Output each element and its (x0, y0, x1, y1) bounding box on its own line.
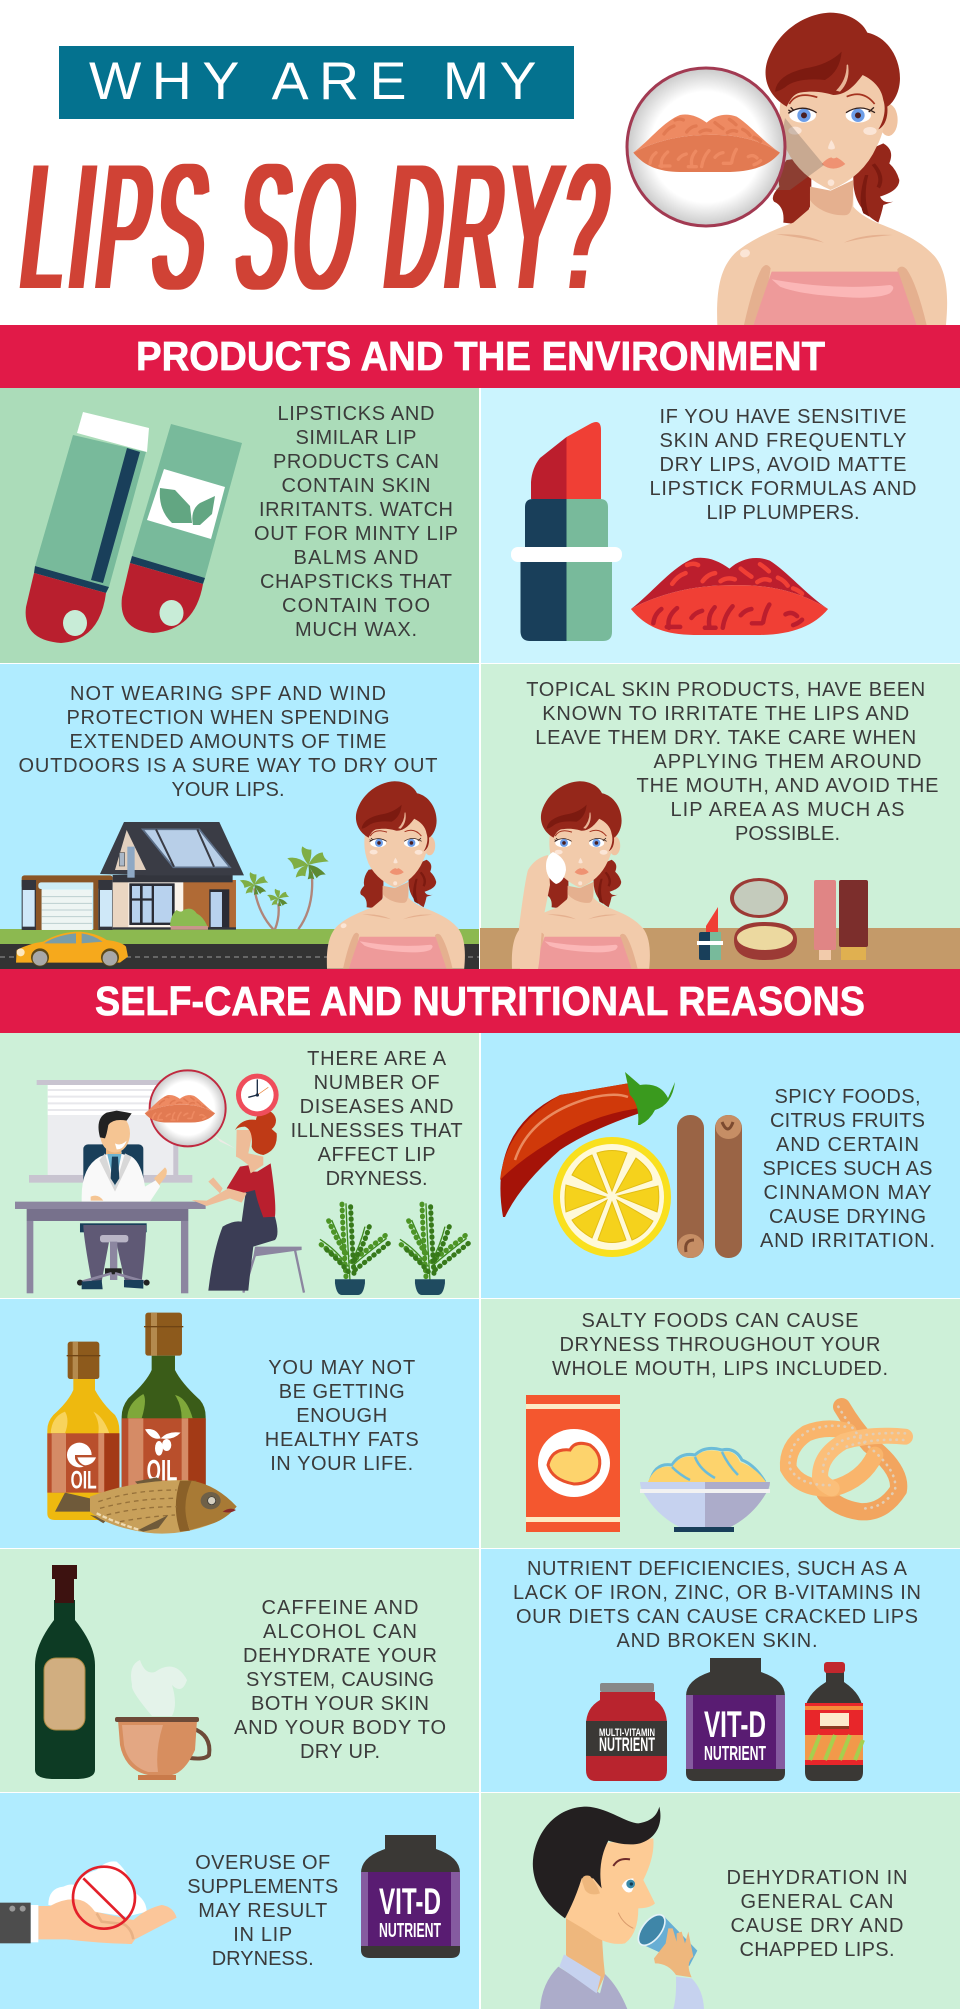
text: matte formulas: IF YOU HAVE SENSITIVE (660, 406, 906, 428)
text: lipsticks: LIPSTICKS AND (278, 403, 434, 425)
text: matte formulas: DRY LIPS, AVOID MATTE (660, 454, 906, 476)
text: salty (552, 1310, 888, 1380)
banner: self-care and nutritional reasons (0, 969, 960, 1033)
icon: hand with cotton pad (519, 852, 566, 969)
text: caffeine: CAFFEINE AND (262, 1597, 418, 1619)
panel: matte lipstick (481, 388, 960, 663)
icon: lipstick (511, 422, 622, 641)
icon: vit-d bottle: NUTRIENT (704, 1743, 766, 1765)
text: lipsticks: IRRITANTS. WATCH (259, 499, 453, 521)
text: topical (526, 679, 938, 845)
icon: bowl of chips (640, 1448, 770, 1532)
icon: vit-d bottle (686, 1658, 785, 1781)
text: lipsticks: CONTAIN TOO (282, 595, 430, 617)
text: matte formulas: SKIN AND FREQUENTLY (660, 430, 906, 452)
icon: vit-d bottle: NUTRIENT (379, 1920, 441, 1942)
text: topical: APPLYING THEM AROUND (654, 751, 922, 773)
text: fats: ENOUGH (296, 1405, 387, 1427)
icon: snack box (526, 1395, 620, 1532)
text: dehydration (726, 1867, 908, 1961)
panel: spicy foods (481, 1033, 960, 1298)
text: spf (18, 683, 438, 801)
title: lips so dry: LIPS SO DRY? (13, 129, 623, 327)
text: dehydration: DEHYDRATION IN (726, 1867, 908, 1889)
text: nutrient deficiencies: LACK OF IRON, ZINC, OR B-VITAMINS IN (513, 1582, 921, 1604)
text: spicy: AND IRRITATION. (760, 1230, 935, 1252)
text: salty: WHOLE MOUTH, LIPS INCLUDED. (552, 1358, 888, 1380)
icon: multi-vitamin jar: MULTI-VITAMIN (599, 1727, 655, 1739)
icon: multi-vitamin jar (586, 1683, 667, 1781)
text: diseases: DRYNESS. (326, 1168, 428, 1190)
icon: vit-d bottle: VIT-D (379, 1881, 441, 1922)
icon: cosmetics (697, 878, 868, 960)
text: fats: YOU MAY NOT (268, 1357, 415, 1379)
text: nutrient deficiencies: AND BROKEN SKIN. (616, 1630, 818, 1652)
text: lipsticks: OUT FOR MINTY LIP (254, 523, 458, 545)
text: spf: OUTDOORS IS A SURE WAY TO DRY OUT (18, 755, 438, 777)
text: topical: THE MOUTH, AND AVOID THE (636, 775, 938, 797)
text: supplements: MAY RESULT (198, 1900, 327, 1922)
text: matte formulas: LIP PLUMPERS. (706, 502, 860, 524)
text: spicy: SPICY FOODS, (774, 1086, 920, 1108)
text: dehydration: GENERAL CAN (740, 1891, 894, 1913)
panel: caffeine and alcohol (0, 1549, 479, 1792)
panel: diseases and illnesses (0, 1033, 479, 1298)
icon: hand with pills (0, 1861, 177, 1944)
text: salty: DRYNESS THROUGHOUT YOUR (560, 1334, 880, 1356)
icon: yellow oil bottle (47, 1342, 119, 1520)
text: spicy: AND CERTAIN (776, 1134, 919, 1156)
text: topical: KNOWN TO IRRITATE THE LIPS AND (542, 703, 909, 725)
text: spf: YOUR LIPS. (172, 779, 284, 801)
text: caffeine (234, 1597, 446, 1763)
tabletop (480, 928, 960, 969)
text: spf: EXTENDED AMOUNTS OF TIME (70, 731, 386, 753)
magnifier circle with lips (627, 68, 785, 226)
panel: healthy fats (0, 1299, 479, 1548)
window (29, 1080, 192, 1183)
text: spf: NOT WEARING SPF AND WIND (70, 683, 386, 705)
figure: woman applying cream (512, 781, 650, 969)
banner: products and the environment (0, 325, 960, 388)
header background (0, 0, 960, 325)
icon: pretzel (788, 1407, 905, 1512)
text: nutrient deficiencies: OUR DIETS CAN CAUSE CRACKED LIPS (516, 1606, 918, 1628)
text: caffeine: DRY UP. (300, 1741, 380, 1763)
text: lipsticks: CONTAIN SKIN (282, 475, 430, 497)
icon: green oil bottle: OIL (147, 1455, 177, 1488)
text: caffeine: SYSTEM, CAUSING (246, 1669, 434, 1691)
desk (15, 1202, 206, 1293)
text: lipsticks (254, 403, 458, 641)
icon: cinnamon sticks (677, 1115, 742, 1258)
icon: house (22, 822, 244, 930)
text: caffeine: BOTH YOUR SKIN (251, 1693, 429, 1715)
text: lipsticks: CHAPSTICKS THAT (260, 571, 452, 593)
text: diseases: NUMBER OF (314, 1072, 440, 1094)
icon: cracked red lips (631, 558, 828, 635)
icon: green oil bottle (122, 1313, 206, 1490)
banner: self-care and nutritional reasons: SELF-CARE AND NUTRITIONAL REASONS (95, 978, 865, 1024)
text: fats: HEALTHY FATS (265, 1429, 419, 1451)
speech bubble with lips (145, 1070, 235, 1148)
icon: vit-d bottle (361, 1835, 460, 1958)
text: supplements: SUPPLEMENTS (187, 1876, 338, 1898)
text: nutrient deficiencies (513, 1558, 921, 1652)
icon: yellow car (16, 932, 128, 966)
doctor (77, 1111, 167, 1289)
text: spicy: CAUSE DRYING (769, 1206, 926, 1228)
text: fats: IN YOUR LIFE. (270, 1453, 413, 1475)
text: spicy (760, 1086, 935, 1252)
icon: left lip balm tube (26, 412, 149, 643)
illustration: oil bottles and fish (47, 1313, 237, 1534)
icon: clock (236, 1074, 279, 1116)
text: topical: LEAVE THEM DRY. TAKE CARE WHEN (535, 727, 916, 749)
panel: salty foods (481, 1299, 960, 1548)
icon: chili pepper (500, 1072, 675, 1217)
heading: why are my (59, 46, 574, 119)
text: caffeine: DEHYDRATE YOUR (243, 1645, 437, 1667)
text: supplements: IN LIP (233, 1924, 292, 1946)
text: diseases: AFFECT LIP (318, 1144, 436, 1166)
text: dehydration: CHAPPED LIPS. (740, 1939, 894, 1961)
road (0, 944, 479, 969)
panel: nutrient deficiencies (481, 1549, 960, 1792)
text: caffeine: AND YOUR BODY TO (234, 1717, 446, 1739)
text: nutrient deficiencies: NUTRIENT DEFICIENCIES, SUCH AS A (527, 1558, 908, 1580)
icon: small red bottle (805, 1662, 863, 1781)
banner: products and the environment: PRODUCTS AND THE ENVIRONMENT (136, 333, 825, 379)
text: lipsticks: SIMILAR LIP (296, 427, 416, 449)
text: fats: BE GETTING (279, 1381, 405, 1403)
text: diseases: ILLNESSES THAT (291, 1120, 463, 1142)
text: spicy: CINNAMON MAY (764, 1182, 932, 1204)
text: dehydration: CAUSE DRY AND (730, 1915, 904, 1937)
icon: vit-d bottle: VIT-D (704, 1704, 766, 1745)
water glass (633, 1910, 697, 1966)
figure: woman outdoors (327, 781, 465, 969)
icon: yellow oil bottle: OIL (71, 1467, 97, 1494)
heading: why are my: WHY ARE MY (89, 52, 547, 111)
illustration: doctor consultation (15, 1070, 469, 1295)
patient woman (192, 1111, 304, 1293)
panel: lip products (0, 388, 479, 663)
no symbol (73, 1867, 135, 1929)
icon: right lip balm tube with mint label (122, 424, 242, 633)
text: topical: POSSIBLE. (735, 823, 840, 845)
text: lipsticks: PRODUCTS CAN (273, 451, 439, 473)
illustration: man drinking water (533, 1807, 704, 2009)
text: salty: SALTY FOODS CAN CAUSE (582, 1310, 858, 1332)
text: diseases: DISEASES AND (300, 1096, 454, 1118)
icon: fish (55, 1477, 237, 1534)
text: matte formulas: LIPSTICK FORMULAS AND (650, 478, 916, 500)
text: supplements (187, 1852, 338, 1970)
text: lipsticks: MUCH WAX. (295, 619, 417, 641)
text: topical: LIP AREA AS MUCH AS (670, 799, 904, 821)
text: fats (265, 1357, 419, 1475)
illustration: woman with magnified lips (627, 13, 947, 325)
icon: steaming cup (115, 1660, 209, 1780)
magnifier beam (772, 118, 824, 190)
text: caffeine: ALCOHOL CAN (263, 1621, 417, 1643)
panel: overuse of supplements (0, 1793, 479, 2009)
icon: wine bottle (35, 1565, 95, 1779)
text: supplements: OVERUSE OF (195, 1852, 330, 1874)
text: diseases (291, 1048, 463, 1190)
panel: spf and wind outdoors (0, 664, 479, 969)
text: spf: PROTECTION WHEN SPENDING (66, 707, 390, 729)
icon: multi-vitamin jar: NUTRIENT (599, 1735, 655, 1756)
text: topical: TOPICAL SKIN PRODUCTS, HAVE BEEN (526, 679, 925, 701)
icon: palm trees (240, 846, 329, 929)
woman figure (717, 13, 947, 325)
text: matte formulas (650, 406, 916, 524)
text: lipsticks: BALMS AND (294, 547, 418, 569)
grass (0, 929, 479, 944)
icon: potted plants (319, 1203, 469, 1295)
text: diseases: THERE ARE A (307, 1048, 447, 1070)
text: spicy: SPICES SUCH AS (762, 1158, 932, 1180)
panel: topical skin products (480, 664, 960, 969)
panel: dehydration (481, 1793, 960, 2009)
text: supplements: DRYNESS. (212, 1948, 314, 1970)
icon: lemon slice (553, 1137, 671, 1257)
text: spicy: CITRUS FRUITS (770, 1110, 925, 1132)
